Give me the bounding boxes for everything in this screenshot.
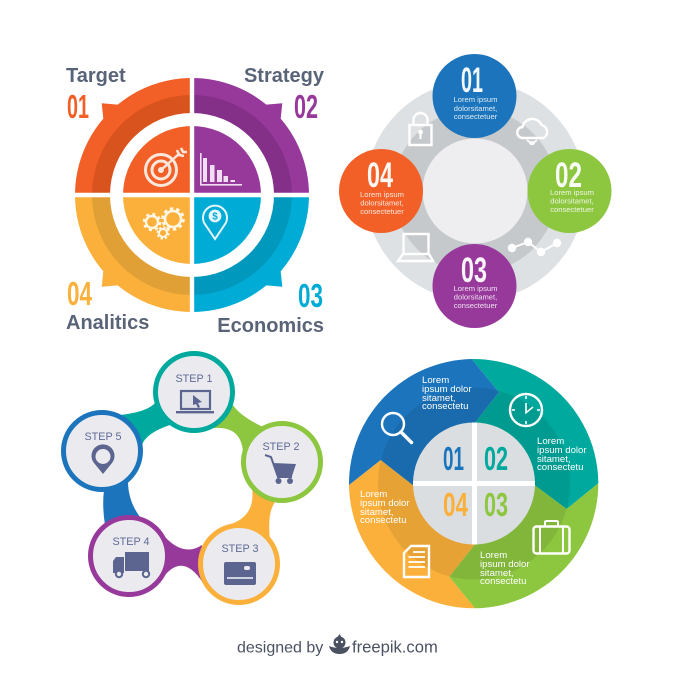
middle grey ring xyxy=(393,109,557,273)
heading: economics: Economics xyxy=(217,315,324,337)
icon: padlock xyxy=(410,113,432,145)
panel: five step cycle xyxy=(64,354,320,602)
text: green segment: sitamet, xyxy=(480,568,514,579)
quadrant: strategy xyxy=(192,78,309,195)
text: orange segment: Lorem xyxy=(360,489,387,500)
segment: teal xyxy=(472,359,598,509)
number 01: 01 xyxy=(443,440,464,477)
heading: target: Target xyxy=(66,65,126,87)
text: teal segment: consectetu xyxy=(537,462,583,473)
icon: network nodes xyxy=(508,238,561,256)
circle 02: dolorsitamet, xyxy=(550,196,594,206)
text: orange segment xyxy=(360,489,410,526)
text: teal segment xyxy=(537,436,587,473)
heading: analitics: Analitics xyxy=(66,312,149,334)
text: teal segment: sitamet, xyxy=(537,454,571,465)
circle 04: Lorem ipsum xyxy=(360,190,404,199)
text: green segment: Lorem xyxy=(480,550,507,561)
text: blue segment: sitamet, xyxy=(422,393,456,404)
step 3: STEP 3 xyxy=(221,543,259,555)
text: teal segment: Lorem xyxy=(537,436,564,447)
icon: bar chart xyxy=(200,153,242,186)
text: blue segment: Lorem xyxy=(422,375,449,386)
number 02: 02 xyxy=(484,440,508,477)
circle 03 xyxy=(432,244,516,328)
number 01: 01 xyxy=(67,88,89,125)
number 03: 03 xyxy=(298,277,323,314)
connector: blue xyxy=(103,481,140,525)
text: orange segment: sitamet, xyxy=(360,507,394,518)
icon: cloud xyxy=(517,119,547,144)
step 4 xyxy=(90,518,168,594)
circle 04: 04 xyxy=(367,156,393,195)
icon: gears xyxy=(144,209,183,239)
text: designed by: designed by xyxy=(237,640,323,656)
connector: orange xyxy=(228,488,275,540)
circle 01: consectetuer xyxy=(454,112,498,121)
footer credit xyxy=(237,634,438,656)
text: blue segment xyxy=(422,375,472,412)
circle 02: 02 xyxy=(555,156,582,195)
number 03: 03 xyxy=(484,486,508,523)
icon: magnifier xyxy=(382,413,412,442)
segment: green xyxy=(449,483,598,608)
icon: location pin with dollar: $ xyxy=(212,212,218,222)
circle 01 xyxy=(432,54,516,138)
step 2: STEP 2 xyxy=(262,441,300,453)
outer grey ring xyxy=(365,81,585,301)
circle 03: consectetuer xyxy=(454,301,498,310)
quadrant: analitics xyxy=(75,195,192,312)
inner pie xyxy=(123,126,261,264)
darker band xyxy=(378,388,570,580)
step 4: STEP 4 xyxy=(112,536,150,548)
text: orange segment: ipsum dolor xyxy=(360,498,410,509)
icon: clock xyxy=(510,394,542,426)
circle 02 xyxy=(528,149,612,233)
icon: freepik mascot xyxy=(329,634,350,654)
circle 04 xyxy=(339,149,423,233)
text: green segment: ipsum dolor xyxy=(480,559,530,570)
circle 02: Lorem ipsum xyxy=(550,188,594,197)
circle 04: consectetuer xyxy=(360,207,404,216)
step 5: STEP 5 xyxy=(84,431,122,443)
circle 01: Lorem ipsum xyxy=(454,95,497,104)
icon: suitcase xyxy=(534,521,570,554)
circle 04: dolorsitamet, xyxy=(360,198,404,208)
heading: strategy: Strategy xyxy=(244,65,325,87)
number 04: 04 xyxy=(443,486,468,523)
step 5 xyxy=(64,412,140,490)
number 04: 04 xyxy=(67,275,92,312)
segment: blue xyxy=(349,359,499,485)
circle 03: dolorsitamet, xyxy=(454,292,497,302)
icon: document xyxy=(404,546,429,577)
connector: green xyxy=(214,405,263,452)
text: green segment: consectetu xyxy=(480,576,526,587)
quadrant: economics xyxy=(192,195,309,312)
circle 01: dolorsitamet, xyxy=(454,104,497,113)
text: teal segment: ipsum dolor xyxy=(537,445,587,456)
segment: orange xyxy=(349,460,475,608)
icon: laptop xyxy=(398,234,433,261)
panel: four-circle ring xyxy=(339,54,612,328)
circle 02: consectetuer xyxy=(550,205,594,214)
panel: quadrant ring chart xyxy=(66,65,325,337)
panel: spiral arrow pie xyxy=(349,359,598,608)
text: green segment xyxy=(480,550,530,587)
text: orange segment: consectetu xyxy=(360,515,406,526)
text: freepik.com: freepik.com xyxy=(352,638,438,656)
step 3 xyxy=(200,526,278,602)
step 1 xyxy=(156,354,232,430)
number 02: 02 xyxy=(294,88,318,125)
connector: purple xyxy=(165,537,203,583)
quadrant: target xyxy=(75,78,192,195)
circle 03: 03 xyxy=(461,251,487,290)
text: blue segment: ipsum dolor xyxy=(422,384,472,395)
icon: target xyxy=(146,148,187,186)
circle 03: Lorem ipsum xyxy=(454,284,497,293)
icon: location pin with dollar xyxy=(203,206,227,239)
text: blue segment: consectetu xyxy=(422,401,468,412)
white ring xyxy=(110,113,274,277)
centre disc xyxy=(413,422,535,544)
connector: teal xyxy=(120,402,170,445)
step 2 xyxy=(244,424,320,500)
circle 01: 01 xyxy=(461,61,483,100)
step 1: STEP 1 xyxy=(175,373,213,385)
central disc xyxy=(422,138,528,244)
